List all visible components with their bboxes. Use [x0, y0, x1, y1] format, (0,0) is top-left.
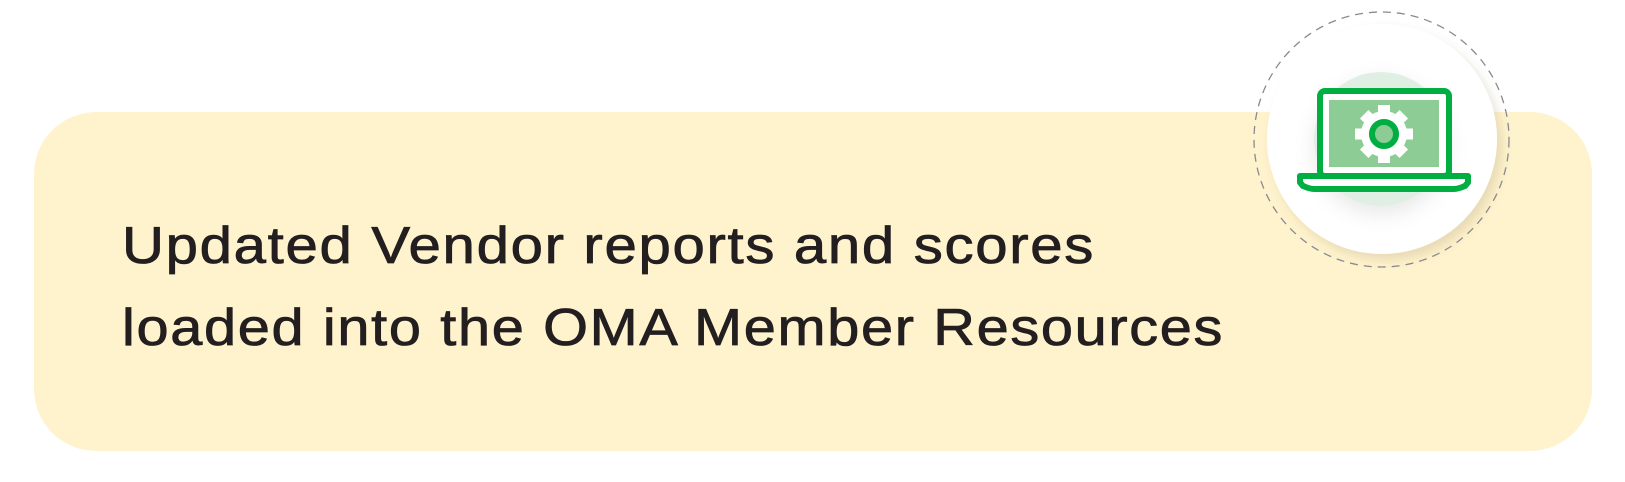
icon badge: laptop with gear [1254, 12, 1509, 267]
icon: laptop [1300, 91, 1468, 189]
white circle [1267, 24, 1497, 254]
text block: main message [122, 217, 1224, 357]
text block: main message: loaded into the OMA Member Resources [122, 299, 1224, 357]
panel: yellow background [34, 112, 1592, 451]
dashed ring [1254, 12, 1509, 267]
pale green circle [1314, 72, 1448, 206]
text block: main message: Updated Vendor reports and scores [122, 217, 1095, 275]
icon: gear [1355, 105, 1413, 163]
